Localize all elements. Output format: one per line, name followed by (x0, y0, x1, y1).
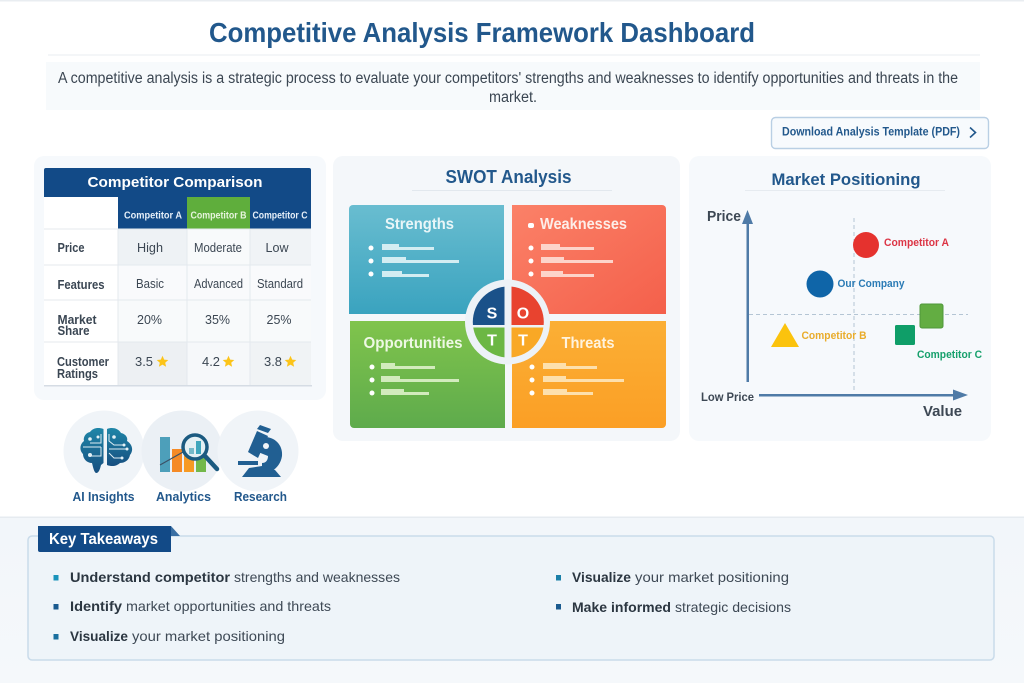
table values: 3.8 (264, 355, 282, 369)
icon labels: Analytics (156, 489, 211, 504)
table heading (44, 168, 311, 197)
takeaway: visualize right: your market positioning (635, 569, 789, 585)
takeaway: understand competitor: Understand competitor (70, 569, 231, 585)
quadrant: strengths (349, 205, 504, 314)
SWOT center circle: O (517, 306, 529, 322)
y axis arrow (742, 210, 753, 382)
table row labels: Ratings (57, 367, 98, 381)
marker: our company: Our Company (838, 278, 905, 290)
takeaway: make informed (556, 599, 791, 615)
table values: 20% (137, 313, 162, 327)
SWOT center circle: T (487, 332, 497, 350)
chart gridlines (749, 218, 968, 392)
table cell shading (44, 229, 312, 386)
takeaway: understand competitor: strengths and weaknesses (234, 569, 400, 585)
table row labels: Market (58, 313, 97, 327)
takeaway: visualize left: Visualize (70, 628, 128, 644)
quadrant: opportunities (350, 321, 505, 428)
SWOT center circle: S (487, 306, 498, 322)
quadrant: strengths: Strengths (385, 216, 454, 233)
takeaway: make informed: strategic decisions (675, 599, 791, 615)
marker: our company (806, 270, 905, 298)
table values: 4.2 (202, 355, 220, 369)
takeaway: visualize left: your market positioning (132, 628, 285, 644)
icon: analytics chart (142, 410, 222, 492)
table values: Low (266, 241, 289, 255)
table column headers: Competitor C (252, 210, 308, 222)
marker: competitor B: Competitor B (802, 330, 867, 342)
marker: competitor A: Competitor A (884, 237, 949, 249)
icon labels: AI Insights (72, 489, 134, 504)
table row labels: Customer (57, 355, 109, 369)
intro text block: market. (489, 89, 537, 106)
takeaway: visualize right (556, 569, 789, 585)
axis labels (701, 209, 962, 420)
takeaway: identify: market opportunities and threats (126, 598, 331, 614)
panel: key takeaways (0, 516, 1024, 683)
panel: competitor comparison (34, 156, 326, 400)
marker: competitor C (895, 304, 982, 361)
rating stars (157, 356, 296, 367)
table values: 25% (266, 313, 292, 327)
intro text block (46, 62, 980, 110)
takeaway: visualize right: Visualize (572, 569, 631, 585)
axis labels: Price (707, 209, 741, 225)
key takeaways ribbon (38, 526, 180, 552)
icon: research microscope (218, 410, 298, 492)
quadrant: threats: Threats (562, 335, 614, 352)
table values: Standard (257, 277, 303, 291)
table column headers: Competitor A (124, 210, 182, 222)
table column headers (118, 197, 311, 229)
x axis arrow (759, 390, 968, 400)
quadrant: opportunities: Opportunities (364, 335, 462, 352)
quadrant: weaknesses (512, 205, 666, 314)
table row labels (57, 241, 109, 381)
takeaway: make informed: Make informed (572, 599, 671, 615)
SWOT center circle (465, 280, 550, 364)
axis labels: Value (923, 403, 962, 420)
panel: market positioning (689, 156, 991, 441)
table values: Moderate (194, 241, 242, 255)
axis labels: Low Price (701, 390, 754, 404)
table row labels: Price (58, 241, 85, 255)
SWOT center circle: T (518, 332, 528, 350)
takeaway: identify: Identify (70, 598, 122, 614)
icon labels (72, 489, 287, 504)
table column headers: Competitor B (190, 210, 247, 222)
table values: High (137, 241, 163, 255)
icon labels: Research (234, 489, 287, 504)
title: Competitive Analysis Framework Dashboard (209, 17, 755, 48)
table values: 35% (205, 313, 230, 327)
table row labels: Features (58, 278, 105, 292)
key takeaways ribbon: Key Takeaways (49, 531, 158, 548)
table row labels: Share (58, 324, 90, 338)
panel: SWOT analysis (333, 156, 680, 441)
intro text block: A competitive analysis is a strategic process to evaluate your competitors' strengths and weaknesses to identify opportunities and threats in the (58, 70, 958, 87)
table heading: Competitor Comparison (88, 174, 262, 191)
quadrant: threats (512, 321, 666, 428)
marker: competitor B (771, 323, 867, 347)
download button (772, 118, 988, 148)
table values: Advanced (194, 277, 243, 291)
SWOT heading: SWOT Analysis (446, 166, 572, 187)
table values (135, 241, 303, 369)
table values: Basic (136, 277, 164, 291)
table values: 3.5 (135, 355, 153, 369)
market heading: Market Positioning (772, 170, 920, 189)
download button: Download Analysis Template (PDF) (782, 126, 960, 138)
icon: AI insights brain (64, 410, 144, 492)
quadrant: weaknesses: Weaknesses (540, 216, 627, 233)
marker: competitor A (853, 232, 949, 258)
takeaway: visualize left (54, 628, 285, 644)
marker: competitor C: Competitor C (917, 349, 982, 361)
takeaway: understand competitor (54, 569, 400, 585)
